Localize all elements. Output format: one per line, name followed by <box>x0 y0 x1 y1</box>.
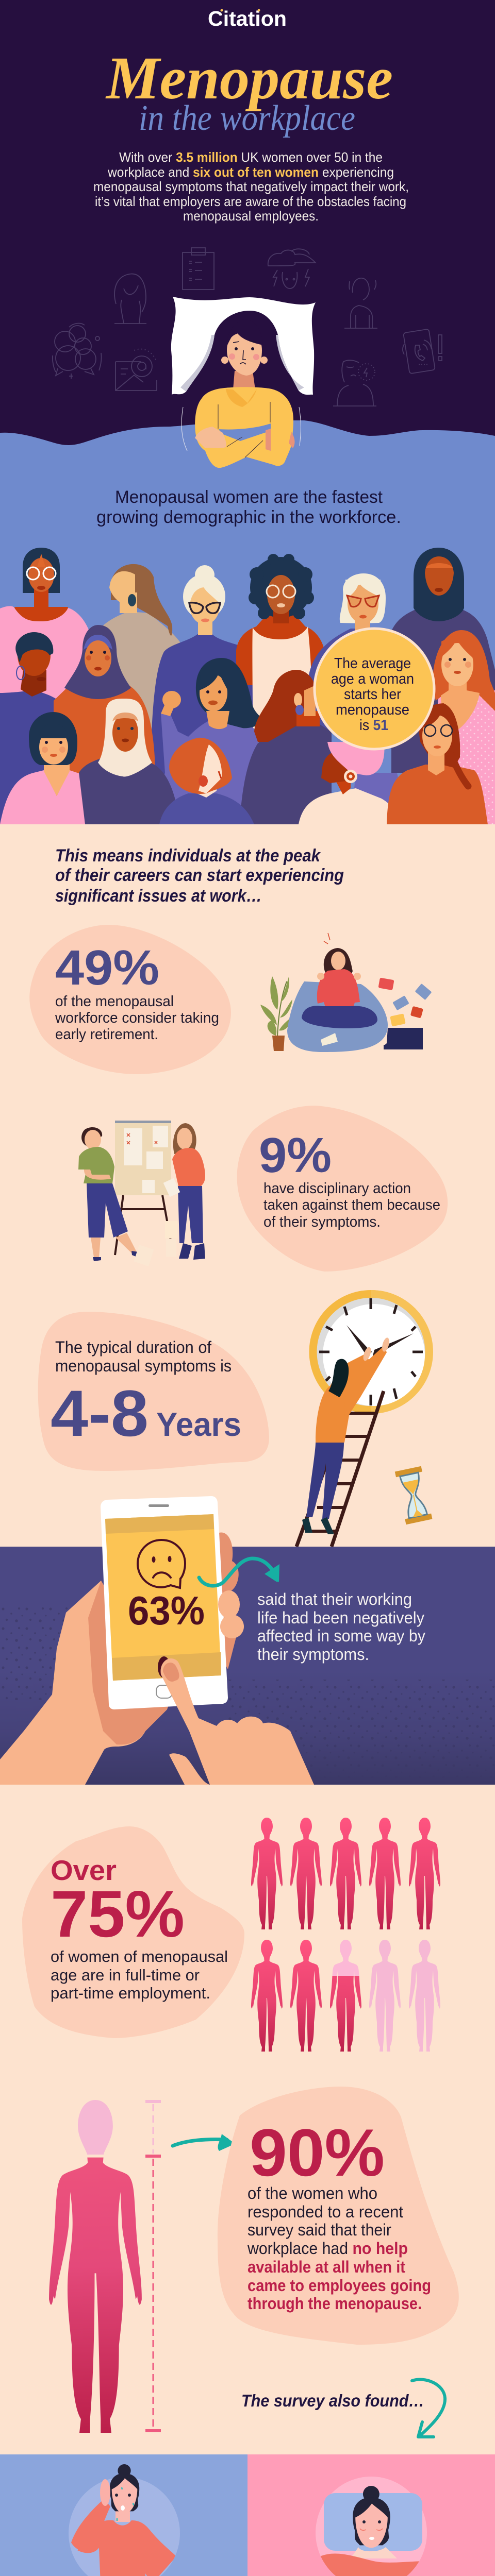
stat panel: 90%: through the menopause. <box>248 2294 422 2313</box>
stat panel: 90%: available at all when it <box>248 2258 405 2276</box>
heading: peak of their careers <box>55 846 344 906</box>
left hand <box>195 427 226 448</box>
stat panel: 4-8 years: menopausal symptoms is <box>55 1357 232 1375</box>
stat panel: over 75%: Over <box>51 1854 117 1886</box>
woman: black bob, pink V-neck <box>0 712 85 824</box>
clock <box>309 1290 433 1414</box>
callout circle: average age <box>315 629 434 749</box>
stat panel: 9%: of their symptoms. <box>263 1214 381 1230</box>
pillow <box>171 297 316 395</box>
background outline icons <box>53 248 442 406</box>
intro text: menopausal employees. <box>183 208 319 224</box>
fingers holding phone and pointing finger <box>161 1590 314 1785</box>
woman: white bun, cat-eye glasses <box>152 565 253 775</box>
stat panel: over 75% <box>22 1826 244 2038</box>
stat panel: 49% <box>29 925 231 1074</box>
sweater <box>195 387 293 468</box>
icon: chat bubbles <box>53 324 102 379</box>
hourglass <box>395 1466 432 1524</box>
stat panel: over 75%: 75% <box>51 1877 185 1951</box>
text: working life affected: their symptoms. <box>257 1645 369 1664</box>
background with speckle <box>0 1547 495 1785</box>
heading: the survey also found: The survey also found… <box>241 2391 424 2410</box>
title: in the workplace <box>139 98 355 138</box>
callout circle: average age: starts her <box>344 686 401 703</box>
person <box>302 933 377 1046</box>
chart: ten female figures, 75% filled <box>251 1818 440 2052</box>
panel: tired or drowsy <box>248 2454 495 2576</box>
stat panel: 9%: taken against them because <box>263 1197 440 1213</box>
face <box>227 332 262 376</box>
callout circle: average age: is 51 <box>359 717 388 734</box>
stat panel: 49%: early retirement. <box>55 1026 158 1043</box>
stat panel: over 75%: of women of menopausal <box>51 1947 228 1965</box>
woman: afro with white glasses <box>236 554 324 743</box>
stat panel: 90%: 90% <box>250 2115 385 2190</box>
text: working life affected <box>257 1590 425 1664</box>
illustration: woman on beanbag <box>260 933 432 1052</box>
stat panel: 49%: workforce consider taking <box>55 1010 219 1026</box>
icon: clipboard <box>183 248 214 290</box>
woman: cream hijab <box>79 699 180 824</box>
panel: hot flushes <box>0 2454 248 2576</box>
intro text: With over 3.5 million UK women over 50 in the <box>119 149 383 165</box>
illustration: woman on ladder turning clock <box>296 1290 433 1547</box>
stat panel: 90%: responded to a recent <box>248 2202 403 2221</box>
stat panel: 9%: have disciplinary action <box>263 1180 411 1197</box>
arrow: teal pointing to 90% <box>173 2134 235 2151</box>
woman: white bob, red glasses <box>308 573 386 730</box>
illustration: crowd of women <box>0 548 495 824</box>
woman: red hair, pink dotted top <box>433 630 495 824</box>
stat panel: over 75%: part-time employment. <box>51 1984 210 2002</box>
text: fastest growing demographic <box>96 487 401 527</box>
title: Menopause <box>105 44 393 112</box>
message bubbles and envelopes <box>378 978 432 1026</box>
intro text: workplace and six out of ten women experiencing <box>107 164 394 180</box>
woman with hand on forehead <box>71 2464 176 2576</box>
blue panel with wave <box>0 420 495 1002</box>
right woman <box>134 1123 205 1266</box>
woman: navy hijab <box>391 548 495 773</box>
heading: peak of their careers: This means individuals at the peak <box>55 846 321 866</box>
stat panel: 9% <box>237 1106 448 1272</box>
plant <box>260 976 292 1051</box>
ladder <box>296 1391 384 1547</box>
board <box>115 1123 171 1195</box>
heading: peak of their careers: of their careers can start experiencing <box>55 866 344 885</box>
hand behind phone <box>0 1532 239 1785</box>
illustration: women at pinboard <box>78 1121 205 1266</box>
stat panel: 90%: workplace had no help <box>247 2239 408 2258</box>
beanbag <box>287 981 388 1052</box>
neck <box>233 371 255 403</box>
hair fringe <box>227 319 263 346</box>
text: fastest growing demographic: Menopausal women are the fastest <box>115 487 383 507</box>
stat panel: 90% <box>218 2087 459 2345</box>
logo: Citation: Citation <box>208 7 287 30</box>
woman: profile, brown hair <box>103 564 180 731</box>
phone <box>101 1496 228 1709</box>
intro text <box>93 149 409 224</box>
icon: ringing phone <box>403 329 442 374</box>
stat panel: 49%: 49% <box>55 940 159 995</box>
text: working life affected: affected in some way by <box>257 1626 425 1645</box>
text: working life affected: said that their working <box>257 1590 412 1608</box>
stat panel: 90%: came to employees going <box>248 2276 431 2295</box>
icon: stressed person <box>344 278 377 328</box>
arrow: teal curve <box>199 1558 279 1586</box>
woman: red curly hair, profile <box>159 738 254 824</box>
callout circle: average age: menopause <box>336 702 409 718</box>
icon: storm clouds and stressed face <box>268 249 316 289</box>
icon: woman with lightning thought <box>333 360 376 406</box>
intro text: menopausal symptoms that negatively impact their work, <box>93 179 409 194</box>
illustration: sleepless woman under pillow <box>171 297 316 468</box>
text: fastest growing demographic: growing demographic in the workforce. <box>96 507 401 527</box>
peach section 2 background <box>0 1785 495 2454</box>
woman in bed <box>320 2486 428 2576</box>
stat panel: 4-8 years <box>38 1312 269 1471</box>
purple section: 63% <box>0 1496 495 1785</box>
number: 63%: 63% <box>128 1588 205 1633</box>
woman: raised fist, long dark hair <box>161 658 259 806</box>
woman: pink turban <box>299 742 407 824</box>
text: working life affected: life had been negatively <box>257 1608 424 1627</box>
woman: purple hijab, orange top <box>54 625 155 796</box>
arrow: teal curved down <box>412 2379 445 2437</box>
stat panel: 4-8 years: The typical duration of <box>55 1338 211 1357</box>
stat panel: 4-8 years: Years <box>156 1405 241 1443</box>
stat panel: 90%: of the women who <box>248 2184 377 2202</box>
stat panel: 90%: survey said that their <box>248 2221 391 2239</box>
blue gap between arms <box>219 423 271 441</box>
left woman <box>78 1127 138 1261</box>
stat panel: 49%: of the menopausal <box>55 993 174 1010</box>
peach section 1 background <box>0 824 495 1547</box>
stat panel: 4-8 years: 4-8 <box>51 1377 148 1450</box>
figure: large woman with measuring scale <box>49 2100 161 2433</box>
laptop <box>384 1028 423 1049</box>
woman: short afro with hoop earring <box>0 632 56 824</box>
icon: woman with hands on head <box>114 274 146 324</box>
callout circle: average age: The average <box>334 655 411 672</box>
callout circle: average age: age a woman <box>331 671 414 687</box>
page background: top dark panel <box>0 0 495 567</box>
intro text: it’s vital that employers are aware of the obstacles facing <box>95 194 406 209</box>
woman: round glasses, braid <box>387 703 488 824</box>
right hand <box>266 429 295 451</box>
woman: glasses, pink top <box>0 548 89 699</box>
heading: peak of their careers: significant issues at work… <box>55 886 262 906</box>
icon: envelope with at sign <box>116 349 157 391</box>
measuring scale <box>145 2100 161 2432</box>
stat panel: over 75%: age are in full-time or <box>51 1966 200 1984</box>
person <box>302 1337 390 1534</box>
stat panel: 9%: 9% <box>259 1128 332 1183</box>
woman: dark red hair, navy top <box>240 670 332 824</box>
icon: sad face speech bubble <box>138 1540 185 1588</box>
